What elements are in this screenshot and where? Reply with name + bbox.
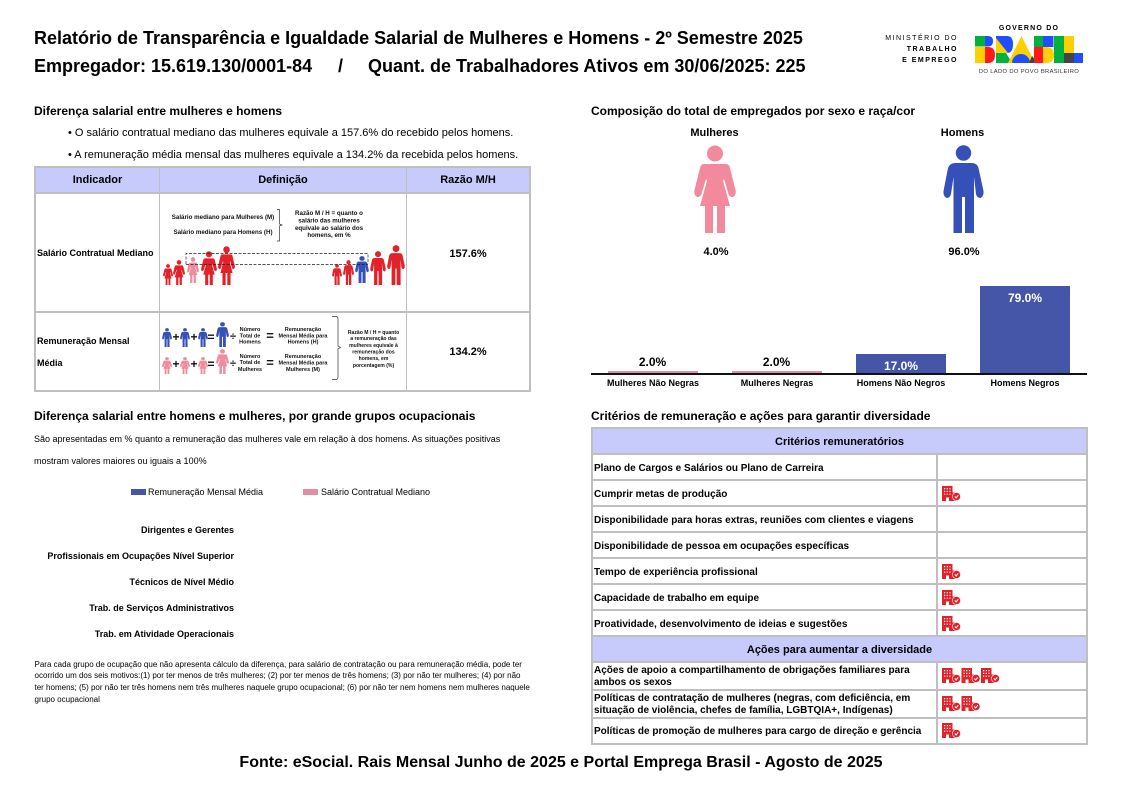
header: razão: Razão M/H: [440, 174, 496, 186]
label: mulheres: Mulheres: [690, 127, 739, 139]
source: Fonte: eSocial. Rais Mensal Junho de 2025 e Portal Emprega Brasil - Agosto de 2025: [239, 754, 883, 771]
heading: composição: Composição do total de empregados por sexo e raça/cor: [591, 104, 915, 118]
row: compartilhamento: [593, 663, 936, 689]
label: dirigentes: Dirigentes e Gerentes: [141, 525, 234, 535]
chart labels: grupos: [47, 525, 234, 639]
value: homens: 96.0%: [948, 246, 980, 258]
logo: ministério: TRABALHO: [907, 46, 958, 53]
logo: ministério: E EMPREGO: [902, 57, 958, 64]
icon: homem: [944, 145, 984, 233]
row: promoção: [593, 719, 936, 743]
row: experiência: [593, 559, 936, 583]
row: equipe: Capacidade de trabalho em equipe: [594, 593, 759, 604]
logo: governo do brasil: DO LADO DO POVO BRASILEIRO: [979, 69, 1079, 75]
heading: diferença salarial: Diferença salarial entre mulheres e homens: [34, 104, 282, 118]
diagram: salário mediano: equivale ao salário dos: [295, 225, 364, 232]
header: ações: [593, 637, 1086, 661]
label: mulheres não negras: Mulheres Não Negras: [607, 378, 699, 388]
row: disponibilidade horas: [593, 507, 936, 531]
cell: 134.2%: [407, 313, 529, 390]
diagram: remuneração média: Mulheres (M): [286, 367, 320, 373]
row: compartilhamento: Ações de apoio a compartilhamento de obrigações familiares para: [594, 665, 910, 676]
cell: definição salário: [160, 194, 406, 311]
axis: [591, 373, 1087, 375]
header: ações: Ações para aumentar a diversidade: [747, 644, 932, 656]
cell: remuneração mensal média: [36, 313, 159, 390]
cell: [938, 481, 1086, 505]
row: contratação: Políticas de contratação de mulheres (negras, com deficiência, em: [594, 693, 910, 704]
row: disponibilidade pessoa: [593, 533, 936, 557]
bar: homens não negros: [856, 354, 946, 374]
cell: salário contratual mediano: [36, 194, 159, 311]
logo: ministério: MINISTÉRIO DO: [885, 35, 958, 42]
footnote: ter homens; (5) por não ter três homens nem três mulheres naquele grupo ocupacional; (6) por não ter nem homens nem mulheres naquele: [34, 683, 530, 692]
footnote: Para cada grupo de ocupação que não apresenta cálculo da diferença, para salário de contratação ou para remuneração média, pode ter: [34, 660, 522, 668]
row: compartilhamento: ambos os sexos: [594, 677, 672, 688]
label: administrativos: Trab. de Serviços Administrativos: [89, 603, 234, 613]
cell: [938, 585, 1086, 609]
value: 17.0%: 17.0%: [884, 359, 918, 373]
label: técnicos: Técnicos de Nível Médio: [129, 577, 234, 587]
bullet: remuneração média: • A remuneração média mensal das mulheres equivale a 134.2% da recebida pelos homens.: [68, 149, 518, 161]
label: homens negros: Homens Negros: [990, 378, 1060, 388]
row: disponibilidade pessoa: Disponibilidade de pessoa em ocupações específicas: [594, 541, 849, 552]
cell: 157.6%: 157.6%: [449, 248, 487, 260]
diagram: remuneração média: ÷: [230, 331, 236, 343]
header: indicador: [36, 168, 159, 192]
diagram: remuneração média: Mensal Média para: [279, 334, 328, 340]
logo: governo do brasil: GOVERNO DO: [999, 25, 1059, 32]
diagram: remuneração média: ÷: [230, 358, 236, 370]
bar: mulheres não negras: [608, 371, 698, 374]
diagram: remuneração média: Total de: [240, 334, 260, 340]
diagram: remuneração média: mulheres equivale à: [349, 343, 398, 349]
diagram: salário mediano: Razão M / H = quanto o: [295, 210, 363, 217]
logo: ministério: [885, 34, 958, 64]
row: metas: [593, 481, 936, 505]
row: experiência: Tempo de experiência profissional: [594, 567, 758, 578]
diagram: remuneração média: =: [207, 357, 215, 371]
value: 2.0%: 2.0%: [639, 355, 666, 369]
cell: definição remuneração: [160, 313, 406, 390]
diagram: remuneração média: Número: [240, 354, 261, 360]
diagram: remuneração média: Mensal Média para: [279, 360, 328, 366]
label: operacionais: Trab. em Atividade Operacionais: [95, 629, 234, 639]
bar: mulheres negras: [732, 371, 822, 374]
header: definição: [160, 168, 406, 192]
cell: [938, 691, 1086, 717]
row: plano de cargos: [593, 455, 936, 479]
label: homens: Homens: [941, 127, 984, 139]
table: indicadores: [34, 166, 531, 392]
label: homens não negros: Homens Não Negros: [857, 378, 945, 388]
text: intro line 2: mostram valores maiores ou iguais a 100%: [34, 456, 207, 466]
header: razão: [407, 168, 529, 192]
diagram: salário mediano: Salário mediano para Mulheres (M): [172, 214, 274, 221]
text: intro line 1: São apresentadas em % quanto a remuneração das mulheres vale em relação à dos homens. As situações positivas: [34, 434, 500, 444]
icon: mulher: [694, 146, 736, 233]
logo: governo do brasil: [975, 25, 1083, 75]
value: 79.0%: 79.0%: [1008, 291, 1042, 305]
cell: [938, 559, 1086, 583]
diagram: remuneração média: +: [172, 330, 180, 344]
header: critérios remuneratórios: [593, 429, 1086, 453]
row: plano de cargos: Plano de Cargos e Salários ou Plano de Carreira: [594, 463, 824, 474]
label: profissionais: Profissionais em Ocupações Nível Superior: [47, 551, 234, 561]
label: mulheres negras: Mulheres Negras: [741, 378, 813, 388]
cell: [938, 663, 1086, 689]
title: Relatório de Transparência e Igualdade Salarial de Mulheres e Homens - 2º Semestre 2025: [34, 28, 803, 48]
value: mulheres: 4.0%: [703, 246, 729, 258]
bar: homens negros: [980, 286, 1070, 374]
row: proatividade: Proatividade, desenvolvimento de ideias e sugestões: [594, 619, 847, 630]
diagram: salário mediano: Salário mediano para Homens (H): [173, 229, 273, 236]
bullet: salário contratual: • O salário contratual mediano das mulheres equivale a 157.6% do recebido pelos homens.: [68, 127, 513, 139]
value: 2.0%: 2.0%: [763, 355, 790, 369]
cell: salário contratual mediano: Salário Contratual Mediano: [37, 248, 154, 258]
employer line: Quant. de Trabalhadores Ativos em 30/06/2025: 225: [368, 56, 806, 76]
swatch: salário: [303, 489, 318, 495]
header: indicador: Indicador: [73, 174, 122, 186]
legend: [131, 487, 430, 497]
diagram: salário mediano: salário das mulheres: [298, 218, 360, 224]
cell: [938, 611, 1086, 635]
diagram: remuneração média: Homens (H): [288, 340, 319, 346]
diagram: remuneração média: =: [266, 355, 274, 370]
diagram: remuneração média: Total de: [240, 360, 260, 366]
footnote: ocorrido um dos seis motivos:(1) por ter menos de três mulheres; (2) por ter menos de três homens; (3) por não ter mulheres; (4) por não: [34, 671, 520, 680]
label: remuneração: Remuneração Mensal Média: [148, 487, 263, 497]
row: contratação: [593, 691, 936, 717]
diagram: salário mediano: homens, em %: [307, 232, 351, 239]
diagram: remuneração média: Homens: [239, 340, 261, 346]
diagram: remuneração média: +: [172, 357, 180, 371]
footnote: grupo ocupacional: [34, 695, 100, 704]
heading: grupos ocupacionais: Diferença salarial entre homens e mulheres, por grande grupos ocupacionais: [34, 409, 475, 423]
row: disponibilidade horas: Disponibilidade para horas extras, reuniões com clientes e viagens: [594, 515, 914, 526]
diagram: remuneração média: homens, em: [359, 356, 389, 362]
diagram: remuneração média: Razão M / H = quanto: [348, 330, 399, 336]
diagram: remuneração média: +: [190, 357, 198, 371]
cell: 157.6%: [407, 194, 529, 311]
diagram: remuneração média: Remuneração: [285, 354, 322, 360]
bar chart: raça/cor: [591, 286, 1087, 388]
diagram: remuneração média: Mulheres: [238, 367, 262, 373]
diagram: remuneração média: Remuneração: [285, 327, 322, 333]
employer line: [34, 56, 806, 76]
header: definição: Definição: [258, 174, 308, 186]
diagram: remuneração média: porcentagem (%): [353, 363, 394, 369]
cell: 134.2%: 134.2%: [449, 346, 487, 358]
diagram: remuneração média: a remuneração das: [350, 336, 397, 342]
heading: critérios: Critérios de remuneração e ações para garantir diversidade: [591, 409, 930, 423]
employer line: /: [338, 56, 343, 76]
cell: remuneração mensal média: Remuneração Mensal: [37, 336, 130, 346]
header: critérios remuneratórios: Critérios remuneratórios: [775, 436, 904, 448]
label: salário: Salário Contratual Mediano: [321, 487, 430, 497]
diagram: remuneração média: remuneração dos: [352, 350, 395, 356]
cell: [938, 507, 1086, 531]
row: promoção: Políticas de promoção de mulheres para cargo de direção e gerência: [594, 726, 921, 737]
diagram: remuneração média: +: [190, 330, 198, 344]
row: proatividade: [593, 611, 936, 635]
diagram: remuneração média: Número: [240, 327, 261, 333]
row: equipe: [593, 585, 936, 609]
cell: [938, 533, 1086, 557]
row: contratação: situação de violência, chefes de família, LGBTQIA+, Indígenas): [594, 705, 893, 716]
cell: [938, 455, 1086, 479]
table: critérios: [591, 427, 1088, 745]
diagram: remuneração média: =: [266, 328, 274, 343]
swatch: remuneração: [131, 489, 146, 495]
cell: [938, 719, 1086, 743]
footnote: [34, 660, 530, 704]
row: metas: Cumprir metas de produção: [594, 489, 727, 500]
employer line: Empregador: 15.619.130/0001-84: [34, 56, 312, 76]
cell: remuneração mensal média: Média: [37, 358, 63, 368]
diagram: remuneração média: =: [207, 330, 215, 344]
